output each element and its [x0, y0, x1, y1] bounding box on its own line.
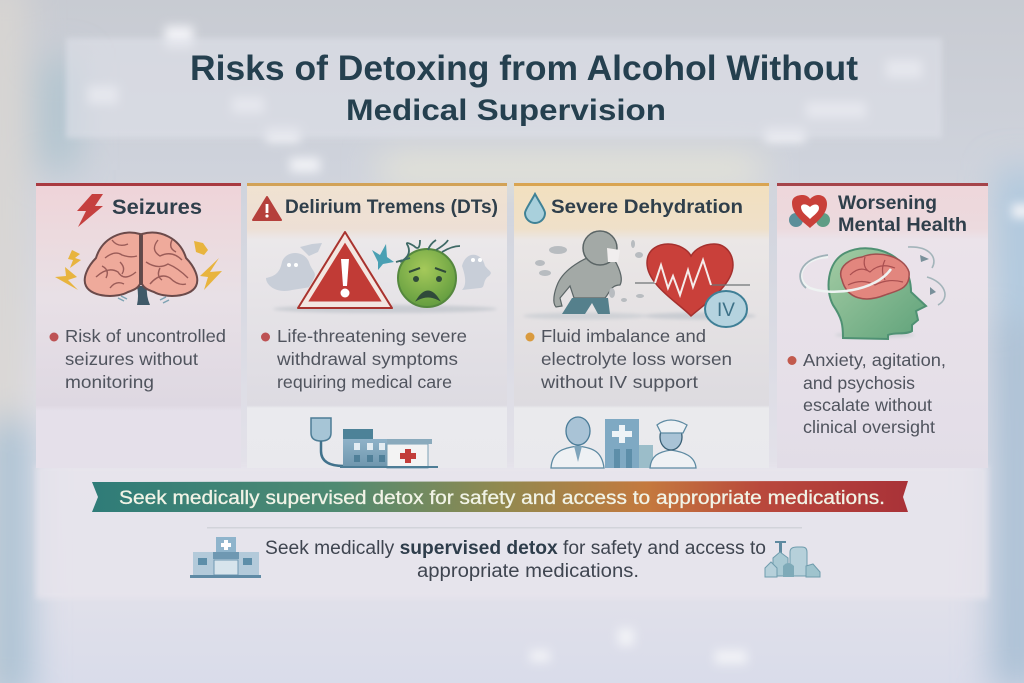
icon: lightning	[77, 194, 103, 227]
bullet: seizures: monitoring	[65, 372, 154, 392]
lower panel background	[36, 465, 988, 599]
icon: brain with sparks	[55, 233, 222, 305]
icon: hospital building	[190, 537, 261, 578]
illustration: warning and distressed face	[266, 232, 497, 313]
icon: doctor, hospital, nurse	[551, 417, 696, 468]
heading: delirium tremens: Delirium Tremens (DTs)	[285, 196, 498, 218]
panel: seizures	[36, 183, 241, 468]
bullet: mental health: clinical oversight	[803, 417, 935, 437]
bullet: mental health	[788, 350, 946, 437]
icon: water drop	[525, 194, 545, 223]
bullet: dehydration	[526, 326, 732, 392]
heading: worsening mental health	[838, 192, 967, 236]
bullet: dehydration: Fluid imbalance and	[541, 326, 706, 346]
panel: severe dehydration	[514, 183, 769, 468]
heading: severe dehydration: Severe Dehydration	[551, 196, 743, 218]
bullet: seizures: Risk of uncontrolled	[65, 326, 226, 346]
banner	[92, 481, 908, 512]
bullet: dehydration: electrolyte loss worsen	[541, 349, 732, 369]
bullet: seizures: seizures without	[65, 349, 198, 369]
panel: worsening mental health	[777, 183, 988, 468]
title panel	[66, 38, 942, 138]
title line 2: Medical Supervision	[346, 94, 666, 127]
bullet: mental health: and psychosis	[803, 373, 915, 393]
bullet: delirium	[261, 326, 467, 392]
bullet: dehydration: without IV support	[540, 372, 698, 392]
bullet: mental health: escalate without	[803, 395, 932, 415]
banner: Seek medically supervised detox for safety and access to appropriate medications.	[119, 488, 885, 509]
bullet: seizures	[50, 326, 226, 392]
heading: seizures: Seizures	[112, 196, 202, 219]
illustration: person, heart, iv: IV	[717, 300, 735, 321]
footer text line 1: Seek medically supervised detox for safety and access to	[265, 538, 766, 559]
title line 1: Risks of Detoxing from Alcohol Without	[190, 49, 858, 88]
illustration: person, heart, iv	[523, 231, 756, 327]
bullet: delirium: Life-threatening severe	[277, 326, 467, 346]
panel: delirium tremens	[247, 183, 507, 468]
icon: heart with circles	[789, 195, 830, 228]
icon: hospital with iv	[311, 418, 438, 468]
heading: worsening mental health: Worsening	[838, 192, 937, 214]
footer note	[207, 527, 802, 582]
bullet: delirium: withdrawal symptoms	[276, 349, 458, 369]
bullet: mental health: Anxiety, agitation,	[803, 350, 946, 370]
bullet: delirium: requiring medical care	[277, 372, 452, 392]
illustration: head with brain	[800, 247, 945, 339]
heading: worsening mental health: Mental Health	[838, 214, 967, 236]
icon: medication bottles	[765, 541, 820, 577]
footer text line 2: appropriate medications.	[417, 561, 639, 582]
icon: warning triangle small	[253, 197, 281, 220]
